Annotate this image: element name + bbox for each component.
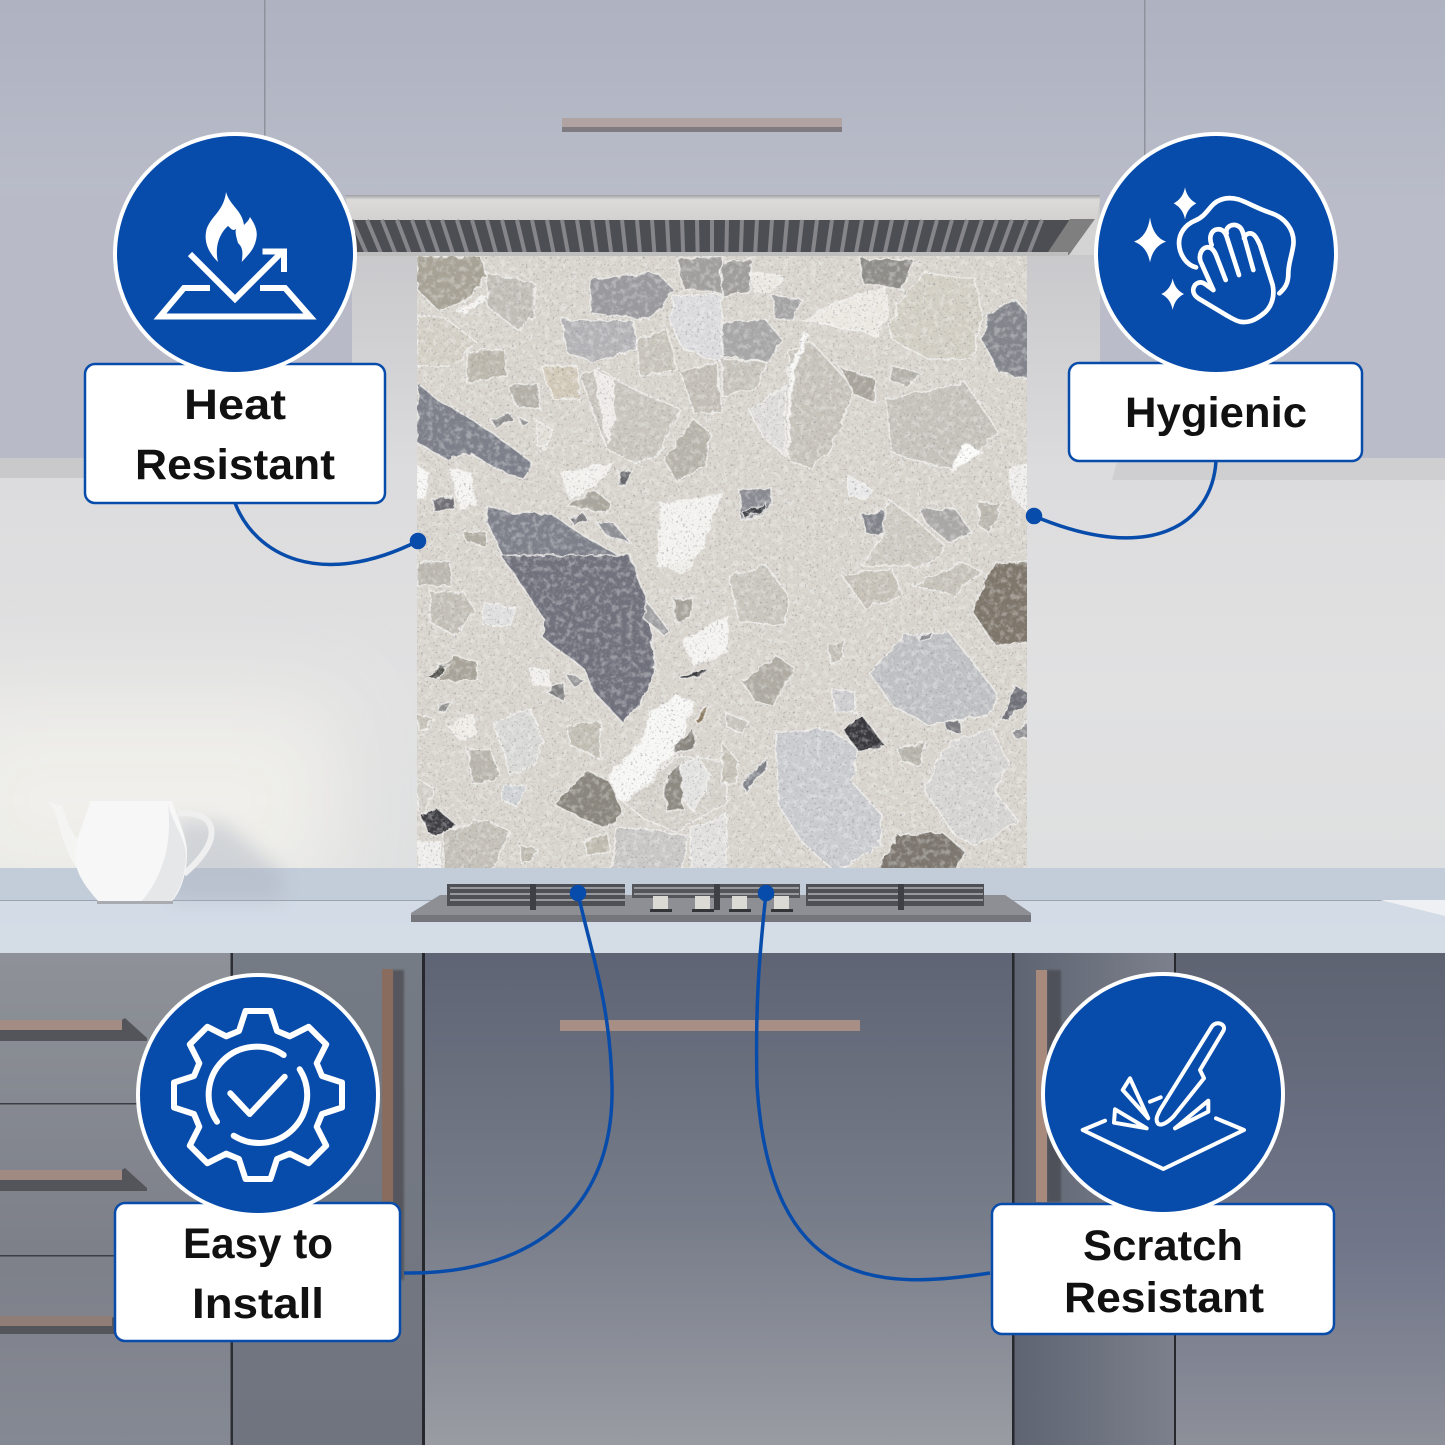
label: scratch resistant: Resistant <box>1064 1274 1264 1322</box>
icon: knife scratching surface <box>1083 1023 1244 1169</box>
badge: scratch resistant <box>1043 974 1283 1214</box>
connector: heat resistant <box>235 503 424 564</box>
icon: flame over surface with arrow <box>160 192 310 316</box>
label: easy to install: Install <box>192 1280 324 1328</box>
icon: sparkles and wiping hand <box>1134 187 1294 322</box>
cooktop <box>411 884 1031 922</box>
wall <box>0 255 1445 900</box>
label: heat resistant: Resistant <box>135 441 335 489</box>
badge: heat resistant <box>115 134 355 374</box>
label: heat resistant: Heat <box>184 381 286 429</box>
countertop <box>0 868 1445 953</box>
label: easy to install: Easy to <box>183 1220 333 1268</box>
badge: hygienic <box>1096 134 1336 374</box>
cabinet handles lower <box>0 969 1061 1334</box>
marble splashback panel <box>417 256 1032 872</box>
label: hygienic: Hygienic <box>1125 389 1307 437</box>
connector: hygienic <box>1028 461 1216 538</box>
connector: easy to install <box>404 886 612 1273</box>
marble quadrant: top left <box>417 256 722 566</box>
range hood <box>345 195 1100 256</box>
label: easy to install <box>115 1203 400 1341</box>
upper cabinets <box>0 0 1445 480</box>
lower cabinets <box>0 953 1445 1445</box>
badge: easy to install <box>138 975 378 1215</box>
teapot <box>48 801 282 904</box>
marble quadrant: bottom right <box>722 562 1032 872</box>
label: scratch resistant: Scratch <box>1083 1222 1243 1270</box>
label: scratch resistant <box>992 1204 1334 1334</box>
connector: scratch resistant <box>757 886 990 1280</box>
label: heat resistant <box>85 364 385 503</box>
icon: gear with check mark <box>174 1011 342 1179</box>
cabinet handle <box>562 118 842 132</box>
marble quadrant: bottom left <box>417 555 727 872</box>
label: hygienic <box>1069 363 1362 461</box>
marble quadrant: top right <box>722 259 1032 566</box>
